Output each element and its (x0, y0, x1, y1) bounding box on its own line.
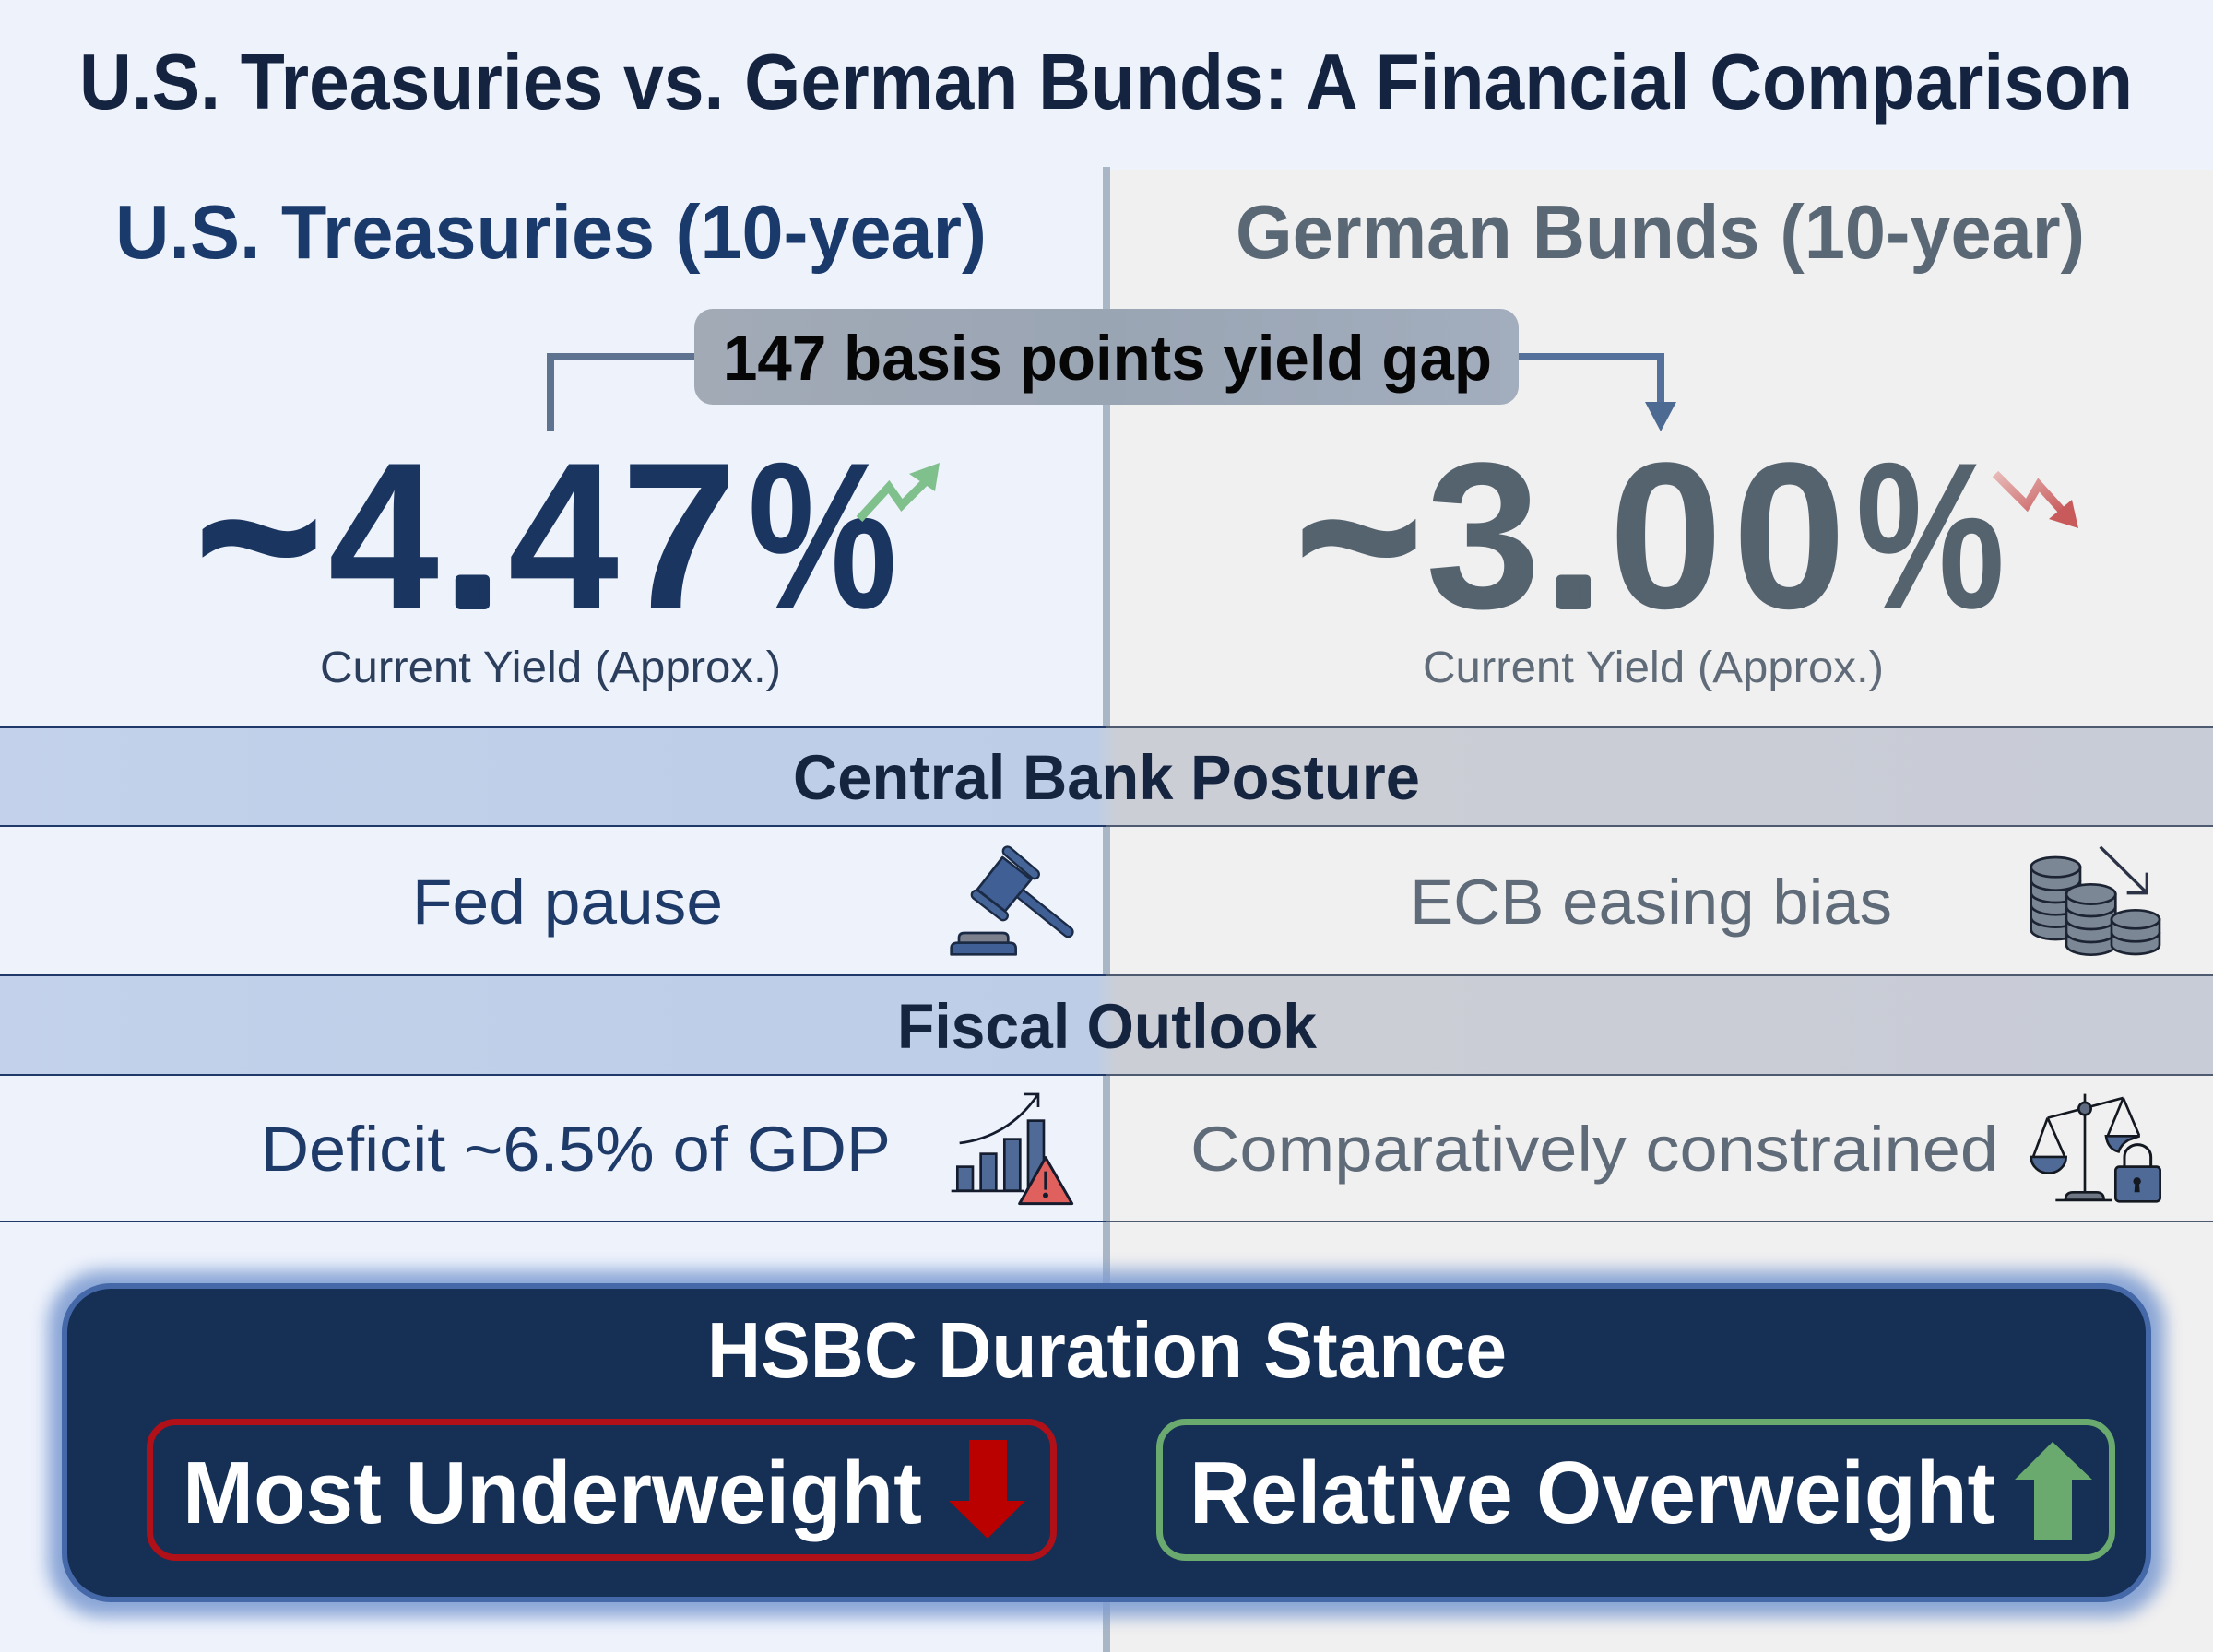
row: Deficit (261, 1094, 1072, 1204)
icon: balance scale with padlock (2031, 1094, 2160, 1201)
icon: gavel (952, 851, 1068, 954)
big number: U.S. yield: ~ (197, 419, 321, 652)
big number: U.S. yield: 7 (621, 419, 738, 652)
icon: red falling trend arrow (1995, 474, 2078, 528)
big number: Bund yield: 0 (1609, 419, 1722, 652)
big number: U.S. yield: 4 (328, 419, 439, 652)
panel: HSBC Duration Stance (48, 1270, 2165, 1617)
row: ECB easing bias (1410, 847, 2160, 955)
icon: rising deficit chart with warning (952, 1094, 1072, 1204)
panel: German Bunds yield (1236, 189, 2085, 692)
text: yield gap: 147 basis points yield gap (723, 323, 1492, 394)
big number: U.S. yield: . (448, 452, 497, 642)
icon: green up arrow (2015, 1442, 2092, 1540)
section band: Fiscal Outlook (0, 974, 2213, 1076)
heading: U.S. Treasuries: U.S. Treasuries (10-year) (115, 189, 987, 275)
icon: red down arrow (949, 1440, 1025, 1539)
caption: U.S. current yield: Current Yield (Approx.) (320, 643, 781, 692)
row: Comparatively constrained (1190, 1094, 2160, 1201)
row: ECB easing bias: ECB easing bias (1410, 867, 1892, 938)
panel: U.S. Treasuries yield (115, 189, 987, 692)
big number: Bund yield: 0 (1733, 419, 1846, 652)
badge: Relative Overweight (1160, 1422, 2112, 1558)
heading: German Bunds: German Bunds (10-year) (1236, 189, 2085, 275)
badge: Most Underweight: Most Underweight (183, 1444, 922, 1542)
big number: U.S. yield: % (748, 419, 897, 652)
icon: falling coin stacks (2031, 847, 2160, 955)
row: Comparatively constrained: Comparatively constrained (1190, 1114, 1998, 1185)
row: Deficit: Deficit ~6.5% of GDP (261, 1114, 891, 1185)
icon: green rising trend arrow (859, 463, 940, 519)
row: Fed pause (412, 851, 1068, 954)
big number: Bund yield: ~ (1296, 419, 1421, 652)
badge: Most Underweight (149, 1422, 1053, 1558)
section band: Central Bank Posture: Central Bank Posture (793, 742, 1420, 813)
big number: Bund yield: 3 (1426, 419, 1541, 652)
connector: left bracket (550, 357, 701, 431)
big number: Bund yield: . (1549, 452, 1598, 642)
caption: Bund current yield: Current Yield (Approx.) (1423, 643, 1884, 692)
callout: yield gap with connectors (550, 309, 1676, 431)
section band: Fiscal Outlook: Fiscal Outlook (897, 991, 1318, 1062)
badge: Relative Overweight: Relative Overweight (1189, 1444, 1995, 1542)
big number: Bund yield: % (1855, 419, 2005, 652)
pill: yield gap (694, 309, 1519, 405)
row: Fed pause: Fed pause (412, 867, 723, 938)
heading: HSBC Duration Stance: HSBC Duration Stance (707, 1307, 1507, 1395)
big number: U.S. yield: 4 (508, 419, 619, 652)
section band: Central Bank Posture (0, 726, 2213, 827)
arrow: right connector to Bund yield (1512, 357, 1676, 431)
